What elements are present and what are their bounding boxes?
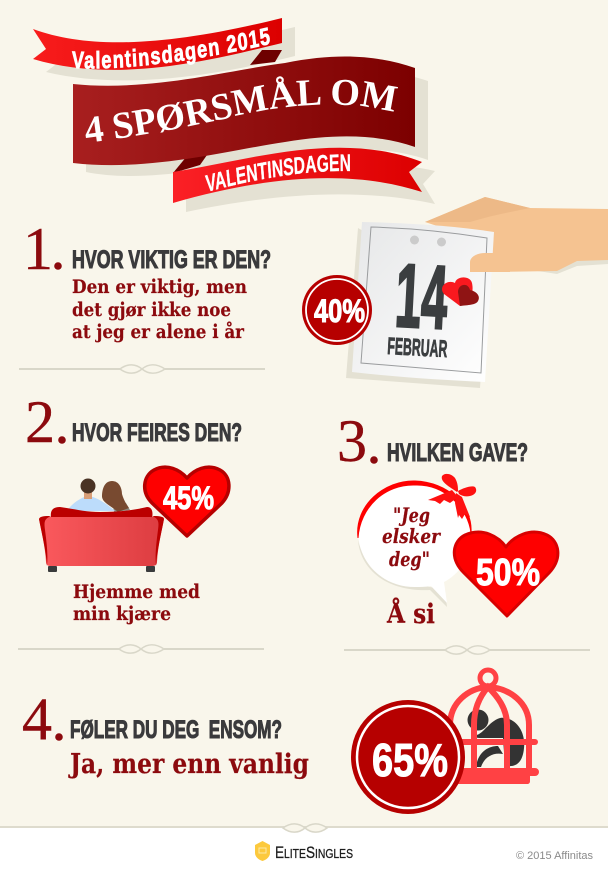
sofa arms <box>39 516 164 566</box>
heading 1: HVOR VIKTIG ER DEN? <box>72 246 271 274</box>
bottom ribbon: Valentinsdagen <box>173 148 422 203</box>
hand <box>425 197 608 272</box>
number 1: 1 <box>23 216 53 282</box>
lonely person <box>468 710 524 767</box>
cage ring <box>480 670 496 686</box>
heart badge: 50% <box>454 532 558 616</box>
bubble quote <box>382 503 441 571</box>
birdcage with lonely person <box>445 670 539 784</box>
section 2 text <box>25 389 242 455</box>
badge: 40%: 40% <box>314 293 365 329</box>
calendar <box>346 222 510 388</box>
number 4: 4 <box>22 686 52 752</box>
hand holding calendar <box>425 197 608 274</box>
bubble shadow <box>358 540 447 607</box>
answer 2: min kjære <box>73 603 171 625</box>
divider 1 <box>19 365 265 373</box>
answer 4: Ja, mer enn vanlig <box>68 749 309 780</box>
section 1 text <box>23 216 271 343</box>
logo wordmark: ELITESINGLES <box>275 843 353 862</box>
couple on sofa <box>39 478 164 572</box>
heading 3: HVILKEN GAVE? <box>387 439 528 467</box>
badge: 65%: 65% <box>372 734 448 786</box>
answer 3: Å si <box>386 596 435 630</box>
calendar holes <box>410 236 446 246</box>
bubble red arc <box>358 481 471 538</box>
footer <box>0 824 608 871</box>
heart badge: 45%: 45% <box>163 480 214 516</box>
answer 1: at jeg er alene i år <box>72 320 245 343</box>
answer 1 <box>72 276 247 343</box>
dot 1 <box>54 262 62 270</box>
sofa backrest <box>51 507 152 518</box>
heart badge: 50%: 50% <box>476 552 540 594</box>
top ribbon: Valentinsdagen 2015 <box>33 18 282 70</box>
answer 1: det gjør ikke noe <box>72 299 231 321</box>
date number 14: 14 <box>393 246 450 349</box>
sofa body <box>39 517 164 566</box>
ribbon folds <box>173 50 282 173</box>
answer 2: Hjemme med <box>73 581 200 603</box>
banner shadows <box>46 27 435 212</box>
hand shadow <box>480 250 608 274</box>
main ribbon: 4 spørsmål om <box>73 56 415 166</box>
cage base <box>450 768 539 784</box>
calendar sheet <box>352 222 494 382</box>
dot 3 <box>370 456 378 464</box>
answer 2 <box>73 581 200 625</box>
cage wires <box>445 687 535 770</box>
title banner <box>33 18 435 212</box>
logo shield <box>255 841 270 861</box>
man <box>67 478 115 511</box>
dot 2 <box>58 436 66 444</box>
heading 4: FØLER DU DEG ENSOM? <box>70 716 282 744</box>
bubble quote: "Jeg <box>393 503 430 527</box>
bubble quote: elsker <box>382 524 441 548</box>
divider 3 <box>344 646 590 654</box>
bow <box>428 474 476 519</box>
number 2: 2 <box>25 389 55 455</box>
bottom ribbon: Valentinsdagen: VALENTINSDAGEN <box>204 154 350 192</box>
heart badge: 45% <box>145 467 229 536</box>
month label: FEBRUAR <box>387 333 448 363</box>
section 3 text <box>337 408 528 474</box>
top ribbon: Valentinsdagen 2015: Valentinsdagen 2015 <box>72 27 270 69</box>
sofa legs <box>48 566 155 572</box>
dot 4 <box>55 733 63 741</box>
answer 1: Den er viktig, men <box>72 276 247 298</box>
footer ornament <box>283 824 327 832</box>
divider 2 <box>18 645 264 653</box>
badge: 65% <box>351 700 465 814</box>
bubble quote: deg" <box>389 547 430 571</box>
calendar hearts <box>442 277 479 306</box>
calendar inner border <box>361 227 487 373</box>
bubble <box>358 481 472 603</box>
badge: 40% <box>302 275 372 345</box>
main ribbon: 4 spørsmål om: 4 SPØRSMÅL OM <box>86 76 398 142</box>
woman <box>102 481 130 512</box>
section 4 text <box>22 686 309 780</box>
heading 2: HVOR FEIRES DEN? <box>72 419 242 447</box>
number 3: 3 <box>337 408 367 474</box>
footer panel <box>0 828 608 871</box>
finger over calendar <box>470 253 510 272</box>
copyright: © 2015 Affinitas <box>516 850 593 862</box>
footer line <box>0 826 608 828</box>
hand upper shade <box>425 197 530 222</box>
calendar shadow <box>346 228 486 388</box>
speech bubble with bow <box>358 474 476 607</box>
